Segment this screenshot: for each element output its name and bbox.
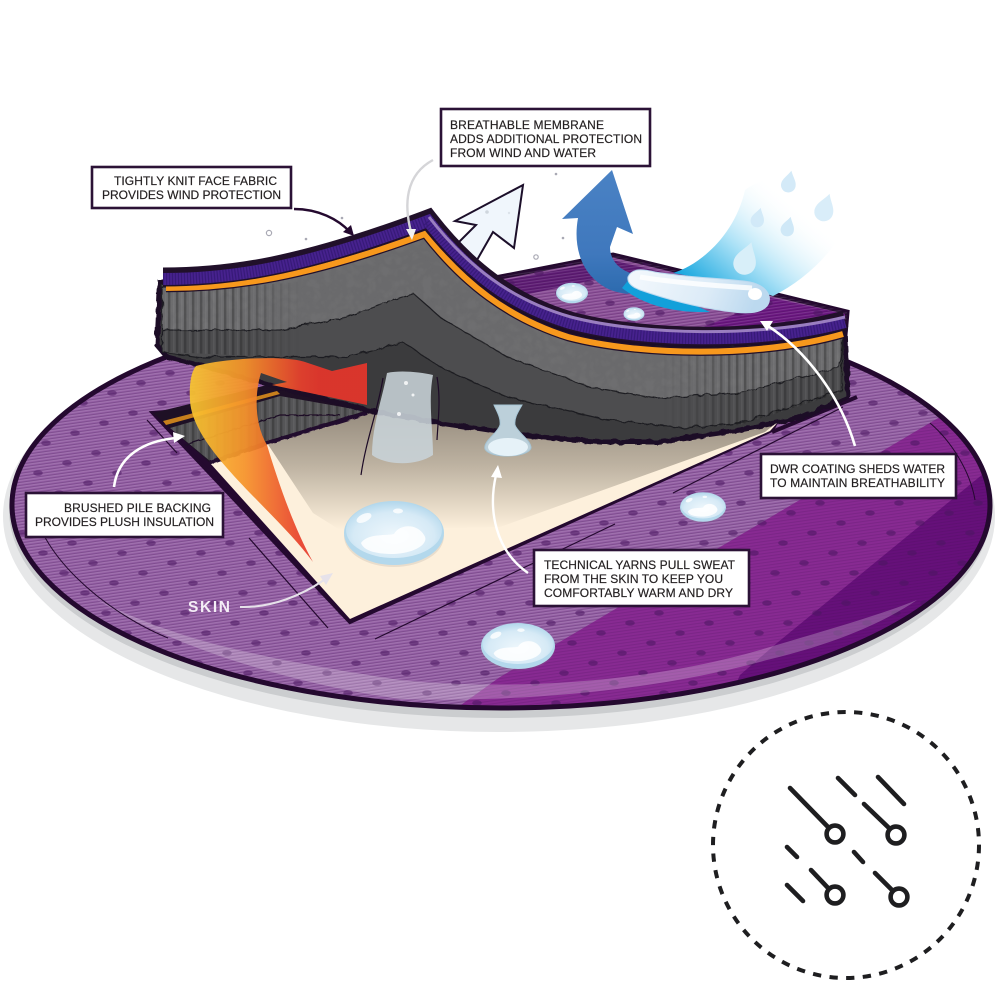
purple face fabric	[163, 219, 845, 336]
callout: DWR coating	[761, 454, 956, 498]
arrow: membrane	[406, 160, 433, 240]
orange membrane	[166, 234, 843, 352]
callout: technical yarns: COMFORTABLY WARM AND DRY	[544, 586, 733, 600]
callout: membrane: BREATHABLE MEMBRANE	[450, 118, 604, 132]
callout: brushed backing: BRUSHED PILE BACKING	[64, 501, 211, 515]
callout: brushed backing: PROVIDES PLUSH INSULATION	[35, 515, 214, 529]
crackle texture	[162, 292, 842, 398]
water bubble: right	[680, 492, 726, 523]
callout: DWR coating: DWR COATING SHEDS WATER	[770, 462, 945, 476]
callout: membrane	[441, 109, 650, 166]
water bubble: small top panel	[624, 307, 644, 321]
water bubble: bottom	[481, 623, 555, 670]
callout: membrane: ADDS ADDITIONAL PROTECTION	[450, 132, 642, 146]
blue moisture arrow	[562, 170, 710, 312]
arrow: skin	[240, 573, 333, 607]
backing layer: dark pile	[157, 228, 848, 442]
arrow: brushed backing	[114, 432, 185, 487]
right ribbing	[688, 338, 842, 426]
callout: DWR coating: TO MAINTAIN BREATHABILITY	[770, 476, 945, 490]
sweat wicking column	[361, 372, 439, 475]
arrow: face fabric	[294, 209, 354, 236]
water bubble: large on skin	[344, 501, 444, 567]
middle layer	[162, 231, 843, 428]
left ribbing	[165, 284, 281, 356]
skin window	[153, 395, 780, 622]
disc drop shadow	[3, 300, 995, 732]
flask-shaped droplet	[485, 405, 531, 456]
white breathability arrow	[440, 185, 523, 274]
callout: membrane: FROM WIND AND WATER	[450, 146, 596, 160]
top surface of fabric (back panel)	[490, 255, 847, 350]
arrow: DWR coating	[760, 321, 855, 446]
callout: face fabric	[92, 167, 291, 208]
label: skin: SKIN	[188, 599, 230, 616]
purple fabric disc	[10, 356, 992, 710]
rain icon badge	[713, 712, 979, 978]
cut-away layers seen in window	[153, 385, 367, 463]
fabric layers stack	[150, 217, 850, 442]
callout: technical yarns: FROM THE SKIN TO KEEP YOU	[544, 572, 723, 586]
floating specks	[266, 173, 564, 259]
arrow: technical yarns	[491, 465, 528, 573]
callout: face fabric: PROVIDES WIND PROTECTION	[102, 188, 281, 202]
callout: technical yarns: TECHNICAL YARNS PULL SWEAT	[544, 558, 736, 572]
heat arrow	[190, 358, 367, 562]
water bubble: top panel	[556, 283, 588, 304]
water drops	[730, 169, 839, 278]
callout: technical yarns	[534, 550, 749, 606]
callout: brushed backing	[26, 493, 223, 537]
upper layer	[162, 234, 843, 398]
beading water pill	[628, 270, 769, 313]
callout: face fabric: TIGHTLY KNIT FACE FABRIC	[114, 174, 277, 188]
water spray	[673, 175, 862, 296]
